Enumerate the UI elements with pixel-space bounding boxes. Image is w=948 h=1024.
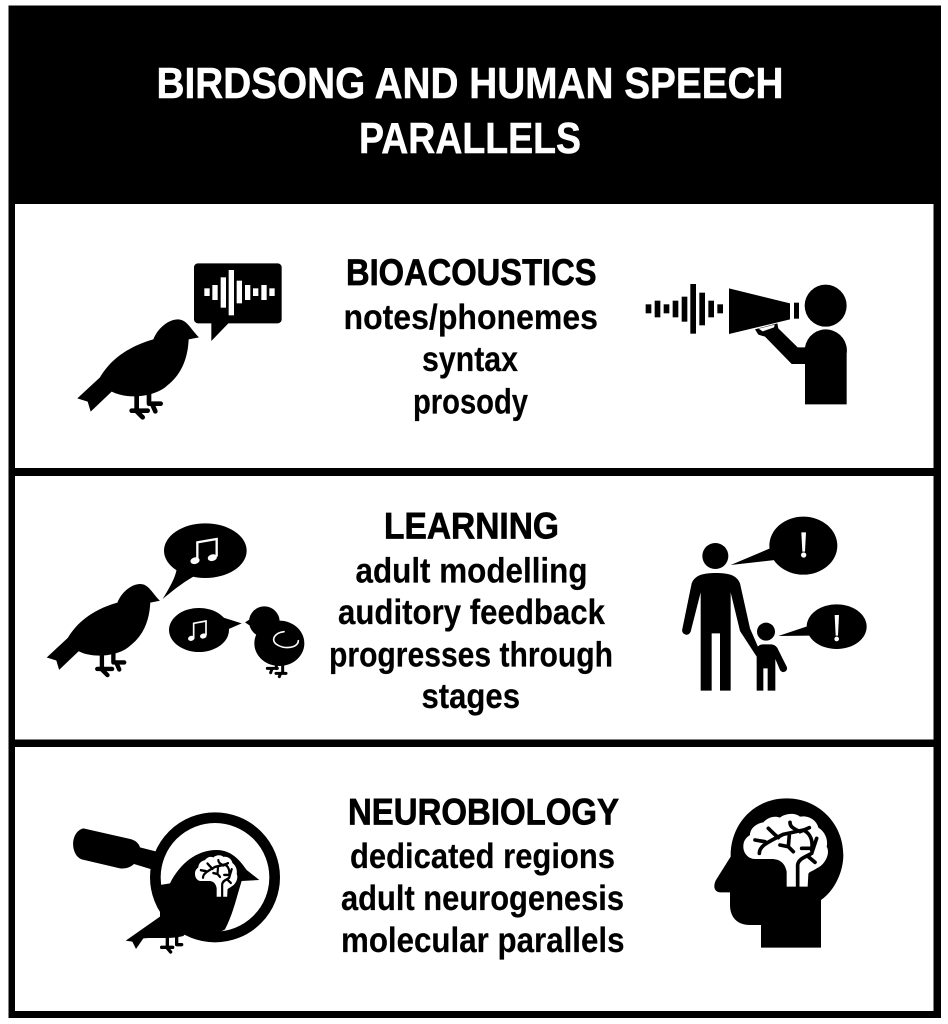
icon: human head with brain — [714, 798, 843, 948]
title — [156, 59, 784, 163]
heading: bioacoustics: BIOACOUSTICS — [346, 252, 596, 293]
title: BIRDSONG AND HUMAN SPEECH — [156, 59, 784, 108]
text: bioacoustics list: syntax — [422, 340, 518, 379]
text: learning list: stages — [422, 677, 520, 716]
panel: learning — [15, 476, 934, 740]
icon: adult bird — [47, 584, 160, 675]
heading: learning: LEARNING — [384, 506, 559, 546]
icon: adult bird and chick singing — [47, 523, 304, 677]
icon: music note bubbles and chick — [163, 523, 304, 677]
icon: magnifying glass over bird brain — [73, 818, 275, 952]
text: learning list: adult modelling — [356, 552, 588, 590]
text: learning list — [329, 552, 613, 716]
text: neurobiology list: molecular parallels — [341, 921, 624, 960]
heading: neurobiology: NEUROBIOLOGY — [348, 792, 619, 832]
panel: neurobiology — [15, 747, 934, 1011]
text: bioacoustics list: prosody — [413, 382, 528, 422]
text: bioacoustics list: notes/phonemes — [344, 298, 598, 337]
title banner — [156, 59, 784, 163]
title: PARALLELS — [359, 114, 581, 163]
icon: bird with sound wave speech bubble — [77, 263, 282, 417]
text: learning list: auditory feedback — [338, 593, 605, 632]
text: neurobiology list: adult neurogenesis — [341, 879, 624, 918]
icon: person with megaphone and sound wave — [646, 284, 847, 404]
text: neurobiology list: dedicated regions — [350, 837, 615, 876]
panel: bioacoustics — [15, 204, 934, 468]
icon: adult and child with speech bubbles — [682, 517, 867, 691]
text: learning list: progresses through — [329, 636, 613, 674]
text: bioacoustics list — [344, 298, 598, 422]
text: neurobiology list — [341, 837, 624, 960]
